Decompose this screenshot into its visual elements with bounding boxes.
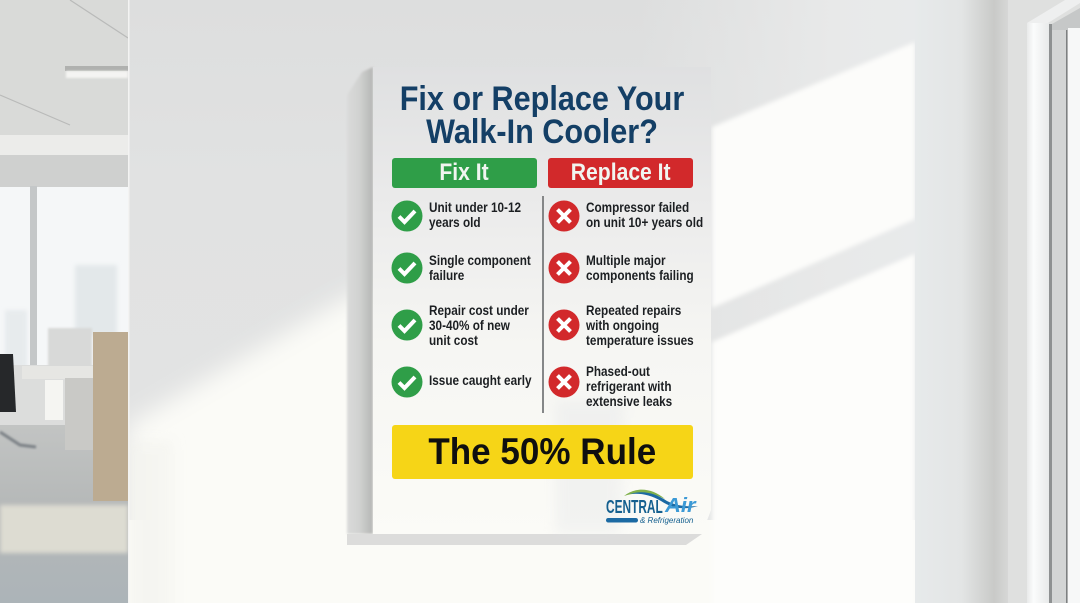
- heading: Replace It: [548, 158, 693, 188]
- window frame: [1008, 0, 1080, 603]
- icon: cross 2: [548, 252, 580, 284]
- icon: check 4: [392, 366, 422, 398]
- panel: replace it list: [548, 200, 703, 409]
- text: fix 2: [429, 253, 531, 283]
- logo word: Air: Air: [665, 495, 696, 517]
- text: fix 3: 30-40% of new: [429, 318, 510, 333]
- icon: check 2: [392, 252, 422, 284]
- text: fix 4: Issue caught early: [429, 373, 531, 388]
- icon: cross 4: [548, 366, 580, 398]
- logo tagline: & Refrigeration: [640, 516, 693, 525]
- text: fix 2: failure: [429, 268, 464, 283]
- callout: the 50% rule: [392, 425, 693, 479]
- text: replace 4: [586, 364, 672, 409]
- logo swoosh: [606, 490, 698, 522]
- icon: cross 3: [548, 310, 580, 340]
- text: replace 2: components failing: [586, 268, 694, 283]
- text: replace 1: on unit 10+ years old: [586, 215, 703, 230]
- panel: fix it list: [392, 200, 532, 398]
- logo wordmark: CENTRAL: [606, 497, 663, 517]
- icon: check 1: [392, 200, 422, 232]
- text: replace 2: [586, 253, 694, 283]
- text: fix 3: [429, 303, 529, 348]
- title: Walk-In Cooler?: [426, 112, 658, 150]
- text: fix 2: Single component: [429, 253, 531, 268]
- heading: Fix It: [392, 158, 537, 188]
- text: fix 1: [429, 200, 521, 230]
- heading: Replace It: Replace It: [571, 159, 670, 186]
- column divider: [542, 196, 544, 413]
- text: replace 3: with ongoing: [586, 318, 659, 333]
- poster shadow: [347, 67, 702, 545]
- icon: check 3: [392, 310, 422, 340]
- text: replace 1: Compressor failed: [586, 200, 689, 215]
- title: [400, 80, 684, 150]
- lighter wall right of poster: [640, 0, 917, 603]
- text: fix 3: Repair cost under: [429, 303, 529, 318]
- faint shadow across poster: [555, 400, 625, 534]
- text: replace 3: [586, 303, 694, 348]
- text: replace 4: Phased-out: [586, 364, 650, 379]
- text: replace 4: extensive leaks: [586, 394, 672, 409]
- heading: Fix It: Fix It: [440, 159, 489, 186]
- text: fix 1: Unit under 10-12: [429, 200, 521, 215]
- poster content: [392, 80, 703, 525]
- poster sheet: [373, 67, 711, 534]
- text: replace 1: [586, 200, 703, 230]
- wall shade toward the window: [915, 0, 1008, 603]
- office scene: [0, 0, 128, 603]
- text: replace 3: Repeated repairs: [586, 303, 681, 318]
- text: replace 4: refrigerant with: [586, 379, 671, 394]
- text: replace 2: Multiple major: [586, 253, 666, 268]
- callout: the 50% rule: The 50% Rule: [429, 431, 656, 472]
- text: fix 3: unit cost: [429, 333, 478, 348]
- light patches on wall: [128, 42, 918, 603]
- logo: Central Air and Refrigeration: [606, 490, 698, 525]
- text: replace 3: temperature issues: [586, 333, 694, 348]
- icon: cross 1: [548, 200, 580, 232]
- title: Fix or Replace Your: [400, 80, 684, 118]
- text: fix 1: years old: [429, 215, 481, 230]
